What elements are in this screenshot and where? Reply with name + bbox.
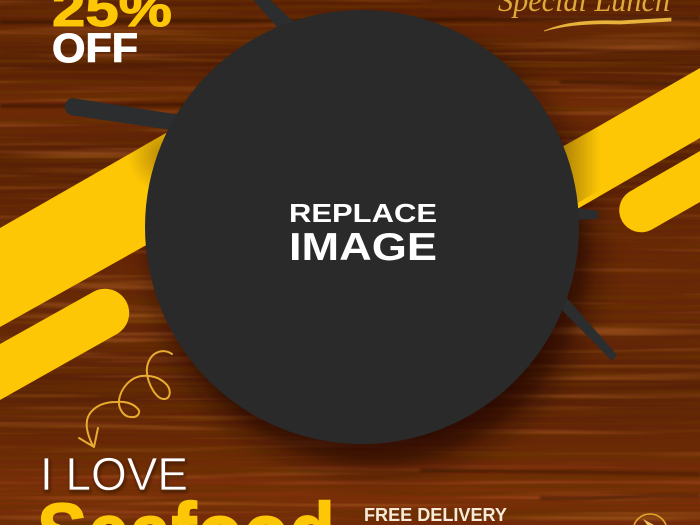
placeholder label: REPLACE [289,198,437,228]
special lunch script heading [498,0,671,31]
icon: curly arrow [79,351,172,447]
right yellow diagonal band [540,68,700,219]
circle shadow [158,34,590,466]
free delivery text: FREE DELIVERY [364,505,507,525]
image placeholder circle [145,10,579,444]
discount badge text: OFF [52,25,138,71]
title: i love: I LOVE [40,448,188,500]
icon: delivery badge [633,514,667,525]
discount badge text [52,0,172,71]
placeholder label [289,198,437,269]
left yellow pill [0,289,129,400]
left yellow diagonal band [0,133,200,327]
dark bar accents [65,0,617,361]
right yellow pill [619,151,700,232]
script underline [544,18,671,31]
placeholder label: IMAGE [289,226,437,269]
